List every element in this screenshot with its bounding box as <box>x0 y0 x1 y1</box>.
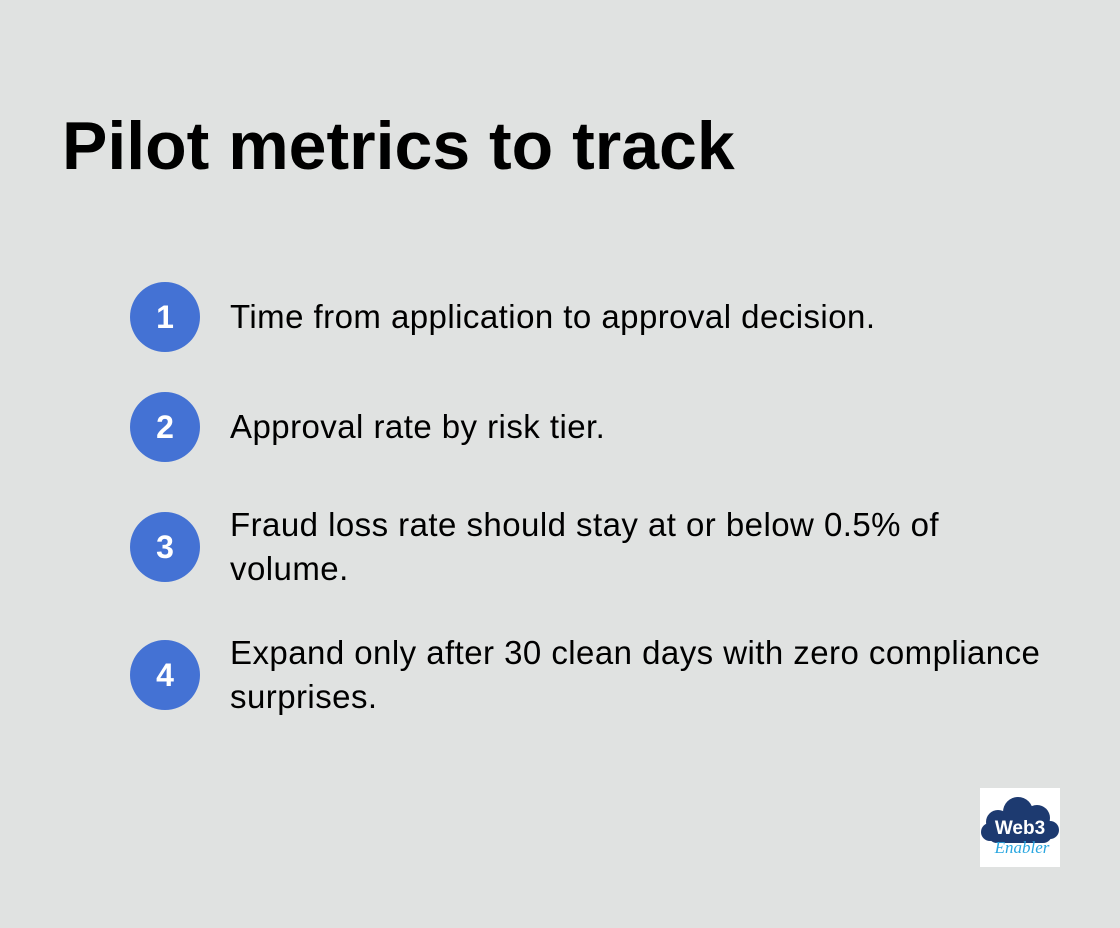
text 1: Time from application to approval decision. <box>230 298 875 335</box>
logo <box>980 788 1060 867</box>
number circle 2 <box>130 392 200 462</box>
text 2: Approval rate by risk tier. <box>230 408 605 445</box>
number circle 2: 2 <box>156 409 174 445</box>
title: Pilot metrics to track <box>62 108 735 184</box>
text 4: Expand only after 30 clean days with zero compliance <box>230 634 1040 671</box>
text 3: Fraud loss rate should stay at or below 0.5% of <box>230 506 939 543</box>
item 1 <box>130 282 875 352</box>
logo: Web3 <box>995 818 1045 839</box>
text 4 <box>230 634 1040 715</box>
text 3: volume. <box>230 550 349 587</box>
text 3 <box>230 506 939 587</box>
number circle 1 <box>130 282 200 352</box>
item 4 <box>130 634 1040 715</box>
item 2 <box>130 392 605 462</box>
item 3 <box>130 506 939 587</box>
number circle 3: 3 <box>156 529 174 565</box>
text 4: surprises. <box>230 678 378 715</box>
number circle 4 <box>130 640 200 710</box>
icon: cloud <box>981 797 1059 843</box>
number circle 3 <box>130 512 200 582</box>
number circle 1: 1 <box>156 299 174 335</box>
logo: Enabler <box>994 838 1050 857</box>
number circle 4: 4 <box>156 657 174 693</box>
